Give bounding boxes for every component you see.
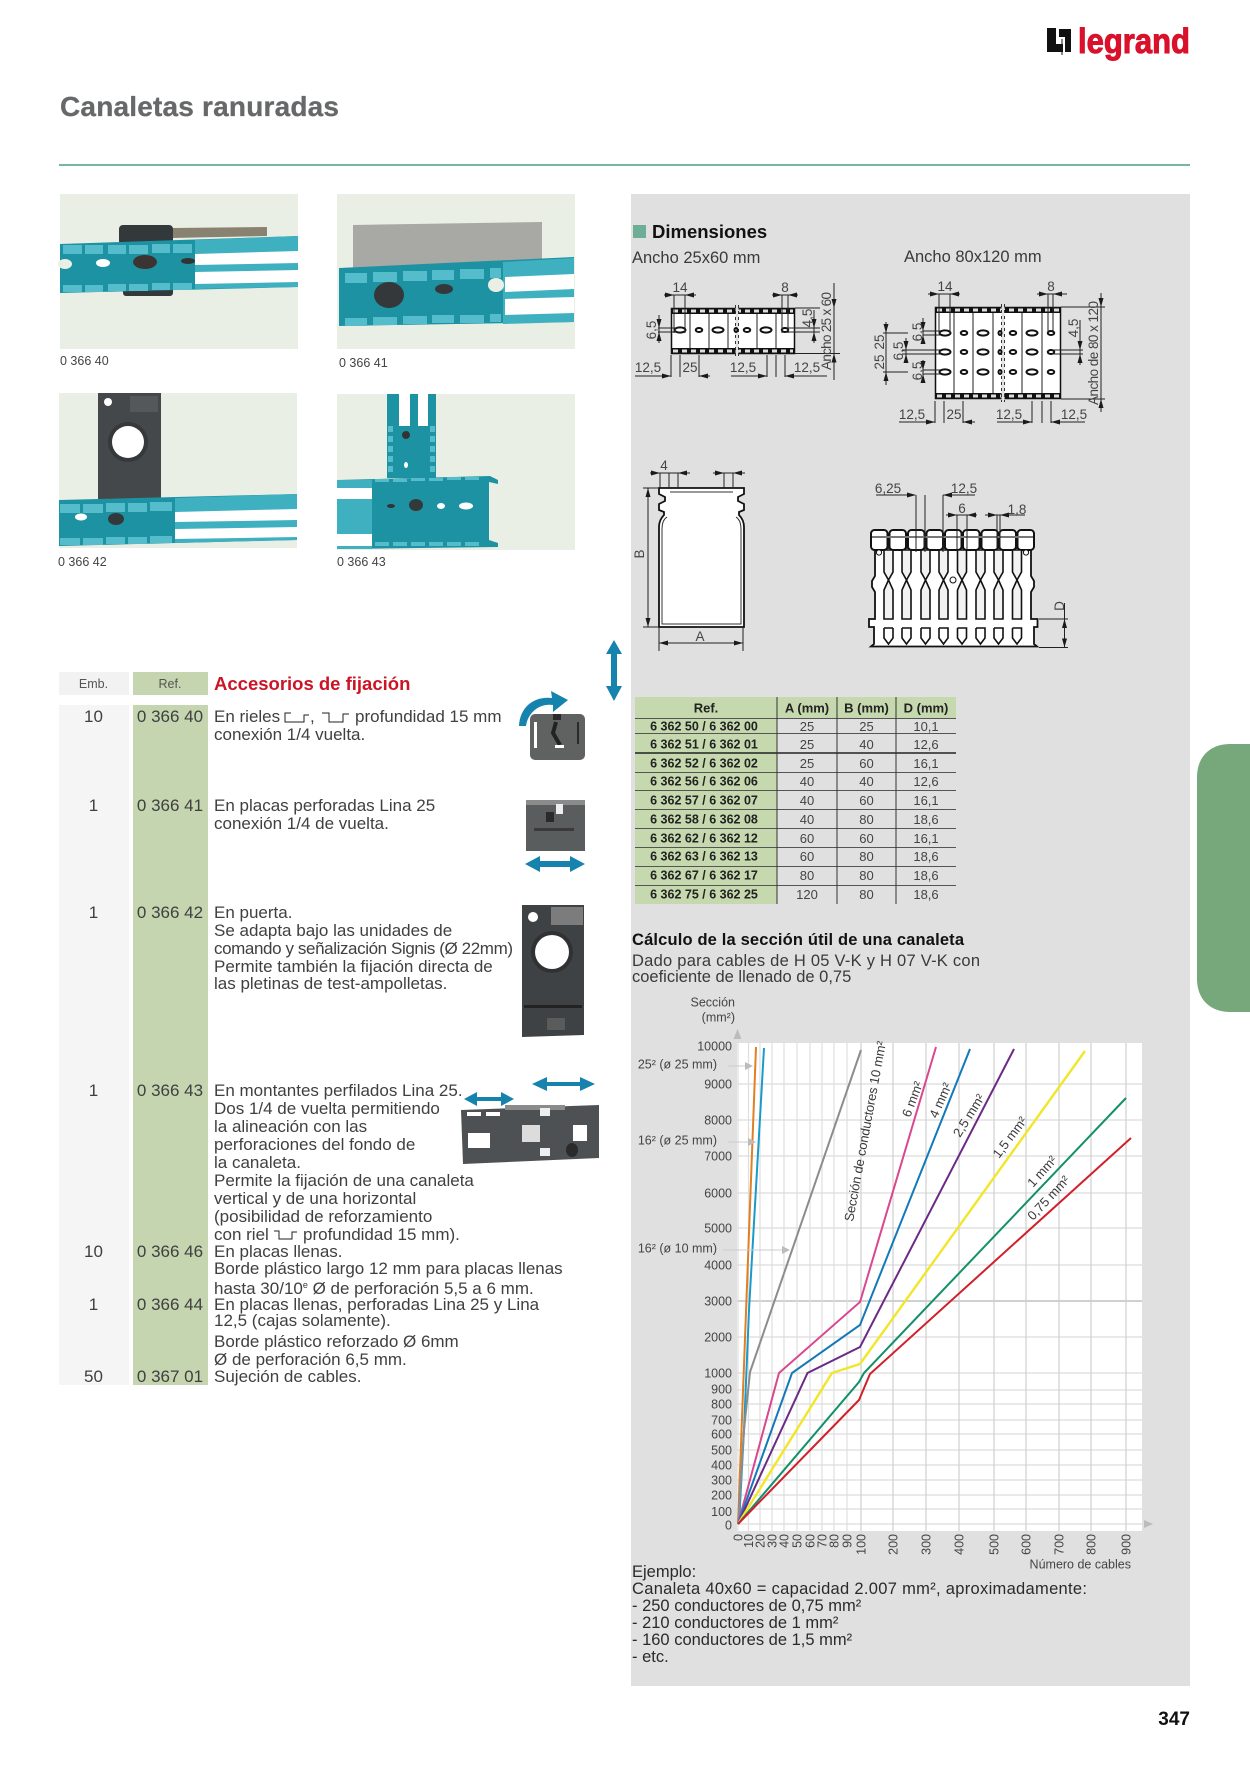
row 0 366 40: 10 xyxy=(84,707,103,726)
x axis labels: 700 xyxy=(1052,1534,1066,1555)
text: calculo description: coeficiente de llenado de 0,75 xyxy=(632,968,851,986)
table: dimensions: 18,6 xyxy=(913,812,939,827)
label: ancho 25x60: Ancho 25x60 mm xyxy=(632,249,760,267)
table: dimensions: 16,1 xyxy=(913,793,939,808)
example text: Ejemplo: xyxy=(632,1563,696,1581)
cable size labels: 25² (ø 25 mm) xyxy=(638,1058,717,1072)
drawing: channel 25x60: 12,5 xyxy=(730,360,756,375)
y axis labels: 1000 xyxy=(704,1366,732,1380)
row 0 366 40: En rieles xyxy=(214,707,280,726)
x axis labels: 80 xyxy=(828,1534,842,1548)
panel: dimensions and chart xyxy=(631,194,1190,1686)
drawing: channel 80x120: 25 xyxy=(872,354,887,370)
table: dimensions: 40 xyxy=(800,793,814,808)
table: dimensions: 6 362 56 / 6 362 06 xyxy=(650,774,758,788)
table: dimensions: 60 xyxy=(800,849,814,864)
icon: horizontal arrow 0 366 41 xyxy=(525,856,585,872)
drawing: comb profile xyxy=(869,481,1068,648)
drawing: channel 25x60: 12,5 xyxy=(635,360,661,375)
table: dimensions: 6 362 58 / 6 362 08 xyxy=(650,812,758,826)
caption 0 366 43: 0 366 43 xyxy=(337,555,386,569)
table: dimensions: 40 xyxy=(800,812,814,827)
photo: 0 366 41 xyxy=(337,194,575,349)
table: dimensions: 6 362 62 / 6 362 12 xyxy=(650,832,758,846)
x axis labels: 300 xyxy=(920,1534,934,1555)
table: dimensions: 60 xyxy=(800,831,814,846)
x axis labels: 50 xyxy=(790,1534,804,1548)
cable size labels xyxy=(638,1058,717,1256)
drawing: channel 25x60: 8 xyxy=(781,280,789,295)
header: Emb.: Emb. xyxy=(79,677,108,691)
caption 0 366 42: 0 366 42 xyxy=(58,555,107,569)
example text: - 210 conductores de 1 mm² xyxy=(632,1614,839,1632)
table: dimensions: 120 xyxy=(796,887,818,902)
y axis labels: 4000 xyxy=(704,1258,732,1272)
row 0 366 46: En placas llenas. xyxy=(214,1242,343,1261)
row 0 366 43: perforaciones del fondo de xyxy=(214,1135,415,1154)
caption 0 366 40: 0 366 40 xyxy=(60,354,109,368)
drawing: comb profile: D xyxy=(1052,601,1067,611)
x axis labels: 900 xyxy=(1120,1534,1134,1555)
column bands xyxy=(59,705,208,1385)
logo: legrand: legrand xyxy=(1078,22,1190,61)
photo: 0 366 43 xyxy=(337,394,575,550)
table: dimensions: A (mm) xyxy=(785,700,829,716)
y axis labels: 500 xyxy=(711,1444,732,1458)
row 0 366 46: 0 366 46 xyxy=(137,1242,203,1261)
drawing: channel cross-section: A xyxy=(695,629,705,644)
y axis labels: 300 xyxy=(711,1474,732,1488)
curves xyxy=(738,1047,1131,1524)
series labels: 2,5 mm² xyxy=(950,1091,988,1140)
drawing: channel 80x120: 6,5 xyxy=(910,362,925,380)
table: dimensions: 40 xyxy=(800,774,814,789)
table: dimensions: 40 xyxy=(859,774,874,789)
drawing: comb profile: 1,8 xyxy=(1008,502,1026,517)
table: dimensions: 80 xyxy=(859,868,874,883)
y axis labels: 7000 xyxy=(704,1150,732,1164)
caption 0 366 41: 0 366 41 xyxy=(339,356,388,370)
row 0 366 40: conexión 1/4 vuelta. xyxy=(214,725,365,744)
y axis labels: 3000 xyxy=(704,1294,732,1308)
drawing: comb profile: 12,5 xyxy=(951,481,977,496)
accessory image 0 366 41 xyxy=(526,800,585,851)
icon: vertical arrow xyxy=(606,640,622,701)
table: dimensions: 18,6 xyxy=(913,868,939,883)
drawing: channel 25x60 xyxy=(635,280,840,380)
series labels: Sección de conductores 10 mm² xyxy=(841,1039,889,1223)
drawing: channel 25x60: 6,5 xyxy=(644,321,659,339)
row 0 366 46 xyxy=(84,1242,563,1298)
row 0 366 43: 0 366 43 xyxy=(137,1081,203,1100)
table: dimensions: 25 xyxy=(800,719,814,734)
chart: section vs cables xyxy=(638,996,1153,1572)
row 0 366 42: En puerta. xyxy=(214,903,292,922)
series labels: 4 mm² xyxy=(926,1080,955,1120)
row 0 366 44: En placas llenas, perforadas Lina 25 y Lina xyxy=(214,1295,540,1314)
drawing: channel 80x120: 6,5 xyxy=(891,342,906,360)
example text: - 160 conductores de 1,5 mm² xyxy=(632,1631,853,1649)
drawing: channel 80x120: 25 xyxy=(872,334,887,350)
drawing: channel 25x60: 14 xyxy=(672,280,688,295)
drawing: comb profile: 6 xyxy=(958,501,966,516)
row 0 366 44: Ø de perforación 6,5 mm. xyxy=(214,1350,407,1369)
drawing: channel 80x120: 8 xyxy=(1047,279,1055,294)
row 0 366 44: 12,5 (cajas solamente). xyxy=(214,1311,391,1330)
table: dimensions: 12,6 xyxy=(913,737,939,752)
row 0 366 43: Permite la fijación de una canaleta xyxy=(214,1171,474,1190)
y axis labels: 10000 xyxy=(697,1040,732,1054)
table: dimensions: Ref. xyxy=(694,700,718,716)
table: dimensions: 6 362 67 / 6 362 17 xyxy=(650,868,758,882)
icon: horizontal arrow left xyxy=(464,1092,514,1106)
icon: horizontal arrow right xyxy=(532,1077,595,1091)
cable size labels: 16² (ø 25 mm) xyxy=(638,1134,717,1148)
photo: 0 366 40 xyxy=(58,194,298,349)
y axis labels: 600 xyxy=(711,1428,732,1442)
text: calculo description: Dado para cables de H 05 V-K y H 07 V-K con xyxy=(632,952,980,970)
row 0 366 46: Ø de perforación 5,5 a 6 mm. xyxy=(308,1279,534,1298)
row 0 366 42: Se adapta bajo las unidades de xyxy=(214,921,452,940)
x axis labels: 40 xyxy=(778,1534,792,1548)
x axis labels: 10 xyxy=(742,1534,756,1548)
x axis labels: 0 xyxy=(732,1534,746,1541)
x axis labels: 400 xyxy=(952,1534,966,1555)
table: dimensions: 16,1 xyxy=(913,756,939,771)
example text: - etc. xyxy=(632,1648,669,1666)
x axis labels: 30 xyxy=(766,1534,780,1548)
y axis labels: 6000 xyxy=(704,1186,732,1200)
heading: calculo: Cálculo de la sección útil de una canaleta xyxy=(632,931,965,949)
example text: - 250 conductores de 0,75 mm² xyxy=(632,1597,862,1615)
table: dimensions: 80 xyxy=(859,887,874,902)
row 0 367 01: 0 367 01 xyxy=(137,1367,203,1386)
example text: Canaleta 40x60 = capacidad 2.007 mm², aproximadamente: xyxy=(632,1580,1087,1598)
y axis labels: 9000 xyxy=(704,1078,732,1092)
table: dimensions: 60 xyxy=(859,756,874,771)
row 0 366 42: Permite también la fijación directa de xyxy=(214,957,493,976)
drawing: channel 80x120: Ancho de 80 x 120 xyxy=(1086,301,1101,405)
series labels: 1,5 mm² xyxy=(989,1113,1030,1161)
drawing: channel 80x120: 12,5 xyxy=(996,407,1022,422)
header: Ref. xyxy=(133,672,208,695)
row 0 367 01 xyxy=(84,1367,361,1386)
x axis labels: 600 xyxy=(1020,1534,1034,1555)
row 0 366 41: 1 xyxy=(89,796,98,815)
x axis labels: 800 xyxy=(1084,1534,1098,1555)
y axis labels: 700 xyxy=(711,1414,732,1428)
row 0 366 42: 0 366 42 xyxy=(137,903,203,922)
table: dimensions: 6 362 51 / 6 362 01 xyxy=(650,738,758,752)
row 0 366 41: 0 366 41 xyxy=(137,796,203,815)
table: dimensions: 80 xyxy=(800,868,814,883)
x axis labels: 70 xyxy=(816,1534,830,1548)
drawing: channel cross-section: 4 xyxy=(660,458,668,473)
drawing: channel cross-section: B xyxy=(632,549,647,559)
accessory image 0 366 40 xyxy=(530,714,585,760)
table: dimensions: 80 xyxy=(859,849,874,864)
y axis labels xyxy=(697,1040,732,1532)
drawing: channel 25x60: Ancho 25 x 60 xyxy=(819,292,834,370)
row 0 366 42 xyxy=(89,903,513,993)
page number: 347 xyxy=(1158,1709,1190,1730)
y axis labels: 100 xyxy=(711,1505,732,1519)
table: dimensions: 6 362 57 / 6 362 07 xyxy=(650,794,758,808)
row 0 366 46: Borde plástico largo 12 mm para placas llenas xyxy=(214,1259,563,1278)
reference markers xyxy=(723,1029,1153,1528)
row 0 366 46: hasta 30/10 xyxy=(214,1279,303,1298)
drawing: channel 25x60: 12,5 xyxy=(794,360,820,375)
drawing: channel 80x120: 12,5 xyxy=(1061,407,1087,422)
row 0 366 43: la alineación con las xyxy=(214,1117,367,1136)
series labels: 6 mm² xyxy=(899,1079,926,1119)
row 0 366 43: vertical y de una horizontal xyxy=(214,1189,416,1208)
x axis labels: 60 xyxy=(804,1534,818,1548)
series labels: 0,75 mm² xyxy=(1024,1172,1073,1223)
row 0 366 43 xyxy=(89,1081,474,1244)
table: dimensions: 10,1 xyxy=(913,719,939,734)
x axis labels: 90 xyxy=(840,1534,854,1548)
row 0 366 43: (posibilidad de reforzamiento xyxy=(214,1207,432,1226)
accessory image 0 366 42 xyxy=(522,905,584,1037)
x axis labels: 20 xyxy=(754,1534,768,1548)
table: dimensions: 6 362 50 / 6 362 00 xyxy=(650,720,758,734)
row 0 366 43: Dos 1/4 de vuelta permitiendo xyxy=(214,1099,440,1118)
x axis labels: 100 xyxy=(854,1534,868,1555)
row 0 366 42: comando y señalización Signis (Ø 22mm) xyxy=(214,939,513,958)
row 0 366 44: 0 366 44 xyxy=(137,1295,203,1314)
table: dimensions: 25 xyxy=(800,756,814,771)
series labels: 1 mm² xyxy=(1024,1152,1060,1190)
drawing: channel 25x60: 4,5 xyxy=(800,309,815,327)
row 0 367 01: Sujeción de cables. xyxy=(214,1367,361,1386)
series labels xyxy=(841,1039,1073,1223)
x axis title: Número de cables xyxy=(1030,1558,1131,1572)
y axis labels: 8000 xyxy=(704,1114,732,1128)
row 0 366 43: la canaleta. xyxy=(214,1153,301,1172)
x axis labels xyxy=(732,1534,1134,1555)
table: dimensions: 40 xyxy=(859,737,874,752)
drawing: channel 25x60: 25 xyxy=(682,360,698,375)
table: dimensions: B (mm) xyxy=(844,700,889,716)
y axis labels: 2000 xyxy=(704,1330,732,1344)
photo: 0 366 42 xyxy=(59,393,297,548)
y axis labels: 400 xyxy=(711,1458,732,1472)
table: dimensions: 16,1 xyxy=(913,831,939,846)
title: Canaletas ranuradas xyxy=(60,91,339,122)
row 0 366 46: 10 xyxy=(84,1242,103,1261)
row 0 366 46: e xyxy=(303,1280,308,1290)
row 0 366 42: las pletinas de test-ampolletas. xyxy=(214,974,447,993)
drawing: channel 80x120: 14 xyxy=(937,279,953,294)
table: dimensions: 80 xyxy=(859,812,874,827)
y axis labels: 0 xyxy=(725,1518,732,1532)
row 0 366 43: profundidad 15 mm). xyxy=(303,1225,460,1244)
row 0 367 01: 50 xyxy=(84,1367,103,1386)
example text xyxy=(632,1563,1087,1666)
drawing: channel 80x120: 6,5 xyxy=(910,323,925,341)
row 0 366 40: 0 366 40 xyxy=(137,707,203,726)
row 0 366 41: conexión 1/4 de vuelta. xyxy=(214,814,389,833)
y axis title: (mm²) xyxy=(702,1010,735,1024)
row 0 366 41: En placas perforadas Lina 25 xyxy=(214,796,435,815)
row 0 366 44: 1 xyxy=(89,1295,98,1314)
table: dimensions: 6 362 75 / 6 362 25 xyxy=(650,888,758,902)
table: dimensions: 18,6 xyxy=(913,887,939,902)
table: dimensions: 25 xyxy=(800,737,814,752)
table: dimensions: 6 362 63 / 6 362 13 xyxy=(650,850,758,864)
table: dimensions: 6 362 52 / 6 362 02 xyxy=(650,756,758,770)
drawing: channel cross-section xyxy=(632,458,745,651)
row 0 366 40 xyxy=(84,707,501,744)
row 0 366 44: Borde plástico reforzado Ø 6mm xyxy=(214,1332,459,1351)
header: Ref.: Ref. xyxy=(159,677,181,691)
row 0 366 44 xyxy=(89,1295,540,1369)
label: ancho 80x120: Ancho 80x120 mm xyxy=(904,248,1042,266)
drawing: channel 80x120: 12,5 xyxy=(899,407,925,422)
side tab xyxy=(1197,744,1250,1012)
drawing: comb profile: 6,25 xyxy=(875,481,901,496)
row 0 366 41 xyxy=(89,796,435,833)
drawing: channel 80x120 xyxy=(872,279,1105,424)
drawing: channel 80x120: 4,5 xyxy=(1066,319,1081,337)
table: dimensions: D (mm) xyxy=(904,700,948,716)
row 0 366 43: En montantes perfilados Lina 25. xyxy=(214,1081,463,1100)
table: dimensions: 60 xyxy=(859,831,874,846)
icon: curved arrow xyxy=(519,691,568,726)
y axis labels: 900 xyxy=(711,1382,732,1396)
heading: accesorios de fijacion: Accesorios de fijación xyxy=(214,673,410,694)
x axis labels: 500 xyxy=(988,1534,1002,1555)
row 0 366 43: con riel xyxy=(214,1225,269,1244)
text: calculo description xyxy=(632,952,980,986)
table: dimensions: 18,6 xyxy=(913,849,939,864)
y axis title xyxy=(691,996,735,1024)
header: Emb. xyxy=(59,672,129,695)
cable size labels: 16² (ø 10 mm) xyxy=(638,1242,717,1256)
y axis title: Sección xyxy=(691,996,735,1010)
x axis labels: 200 xyxy=(886,1534,900,1555)
row 0 366 42: 1 xyxy=(89,903,98,922)
row 0 366 40: , xyxy=(310,707,315,726)
table: dimensions xyxy=(635,697,956,904)
row 0 366 40: profundidad 15 mm xyxy=(355,707,501,726)
y axis labels: 5000 xyxy=(704,1222,732,1236)
drawing: channel 80x120: 25 xyxy=(946,407,962,422)
y axis labels: 200 xyxy=(711,1488,732,1502)
heading: dimensiones: Dimensiones xyxy=(652,221,767,242)
table: dimensions: 25 xyxy=(859,719,874,734)
table: dimensions: 12,6 xyxy=(913,774,939,789)
table: dimensions: 60 xyxy=(859,793,874,808)
accessory image 0 366 43 xyxy=(461,1105,599,1164)
y axis labels: 800 xyxy=(711,1398,732,1412)
row 0 366 43: 1 xyxy=(89,1081,98,1100)
